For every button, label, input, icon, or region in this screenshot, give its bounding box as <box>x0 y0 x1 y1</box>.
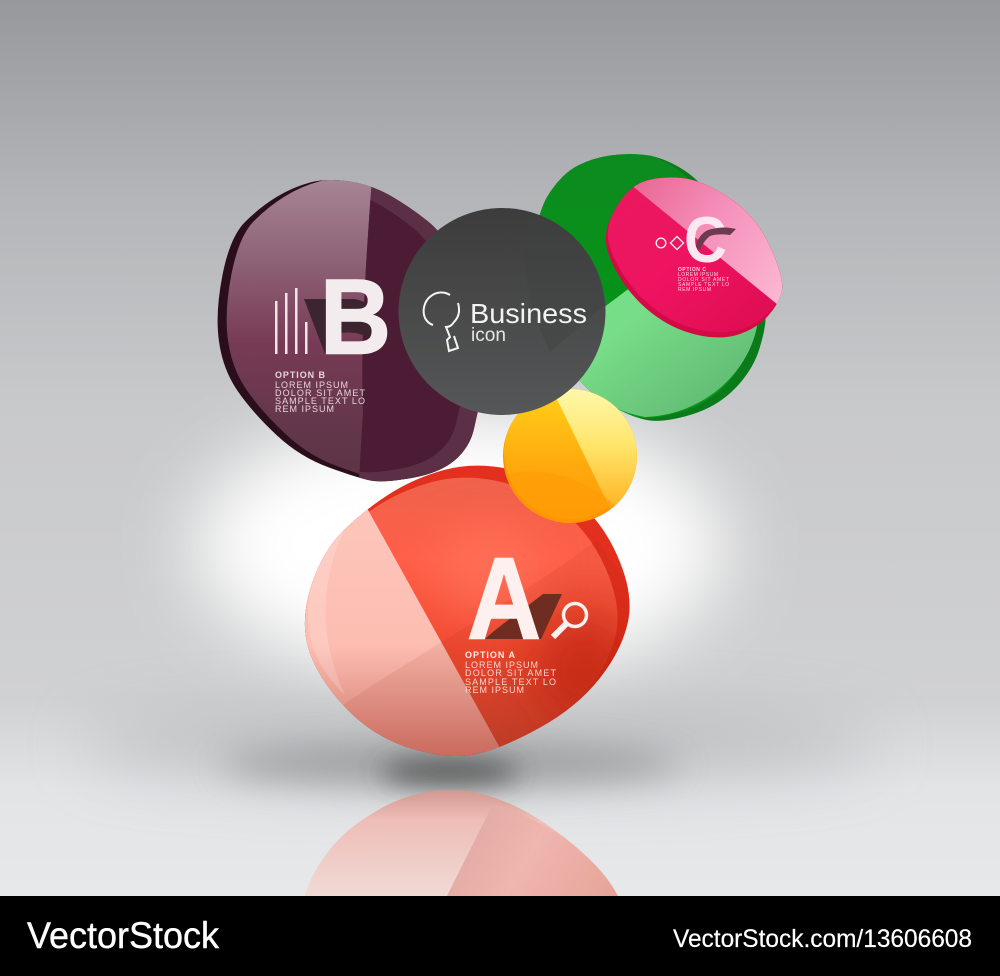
green dark rim <box>533 154 766 421</box>
panel: option B purple shape <box>218 180 478 482</box>
option C text: DOLOR SIT AMET <box>678 277 729 283</box>
option B text: OPTION B <box>275 370 326 380</box>
floor shadow <box>80 713 880 785</box>
panel: option A red shape <box>304 466 630 756</box>
purple pale face <box>227 179 493 480</box>
icon: bars <box>275 288 308 354</box>
option A text <box>465 650 556 695</box>
heading: Business: Business <box>470 298 587 329</box>
option A text: OPTION A <box>465 650 516 660</box>
deep red shading <box>535 615 635 725</box>
option C text <box>678 267 729 293</box>
red highlight <box>441 532 538 616</box>
panel: green shape <box>523 151 766 421</box>
pink face <box>608 178 782 332</box>
option B text <box>275 370 366 414</box>
option B text: DOLOR SIT AMET <box>275 388 366 398</box>
letter A with shadow: A <box>467 534 541 664</box>
option B text: REM IPSUM <box>275 404 334 414</box>
watermark: url: VectorStock.com/13606608 <box>673 925 972 953</box>
option A text: REM IPSUM <box>465 685 524 695</box>
option A text: SAMPLE TEXT LO <box>465 677 556 687</box>
red face <box>293 478 618 768</box>
letter B with shadow: B <box>320 256 391 376</box>
pale left wedge <box>305 510 500 756</box>
dark edge <box>218 180 484 481</box>
facet <box>344 544 618 756</box>
label: icon: icon <box>471 325 506 346</box>
option B text: SAMPLE TEXT LO <box>275 396 365 406</box>
icon: circle and diamond <box>656 236 684 250</box>
icon: magnifier <box>553 604 586 637</box>
panel: option C pink shape <box>606 178 782 338</box>
reflection of red shape <box>305 790 618 896</box>
option C text: LOREM IPSUM <box>678 272 718 278</box>
option C text: REM IPSUM <box>678 287 711 293</box>
option A text: DOLOR SIT AMET <box>465 668 556 678</box>
option B text: LOREM IPSUM <box>275 380 348 390</box>
green faces <box>523 151 758 418</box>
watermark: brand: VectorStock <box>27 915 219 956</box>
icon: light bulb key <box>424 292 459 351</box>
footer bar <box>0 896 1000 976</box>
option C text: SAMPLE TEXT LO <box>678 282 729 288</box>
purple dark face <box>359 187 478 482</box>
option A text: LOREM IPSUM <box>465 660 538 670</box>
panel: business icon circle <box>398 208 606 415</box>
option C text: OPTION C <box>678 267 706 273</box>
panel: orange shape <box>503 385 640 530</box>
letter C with shadow: C <box>684 203 727 276</box>
